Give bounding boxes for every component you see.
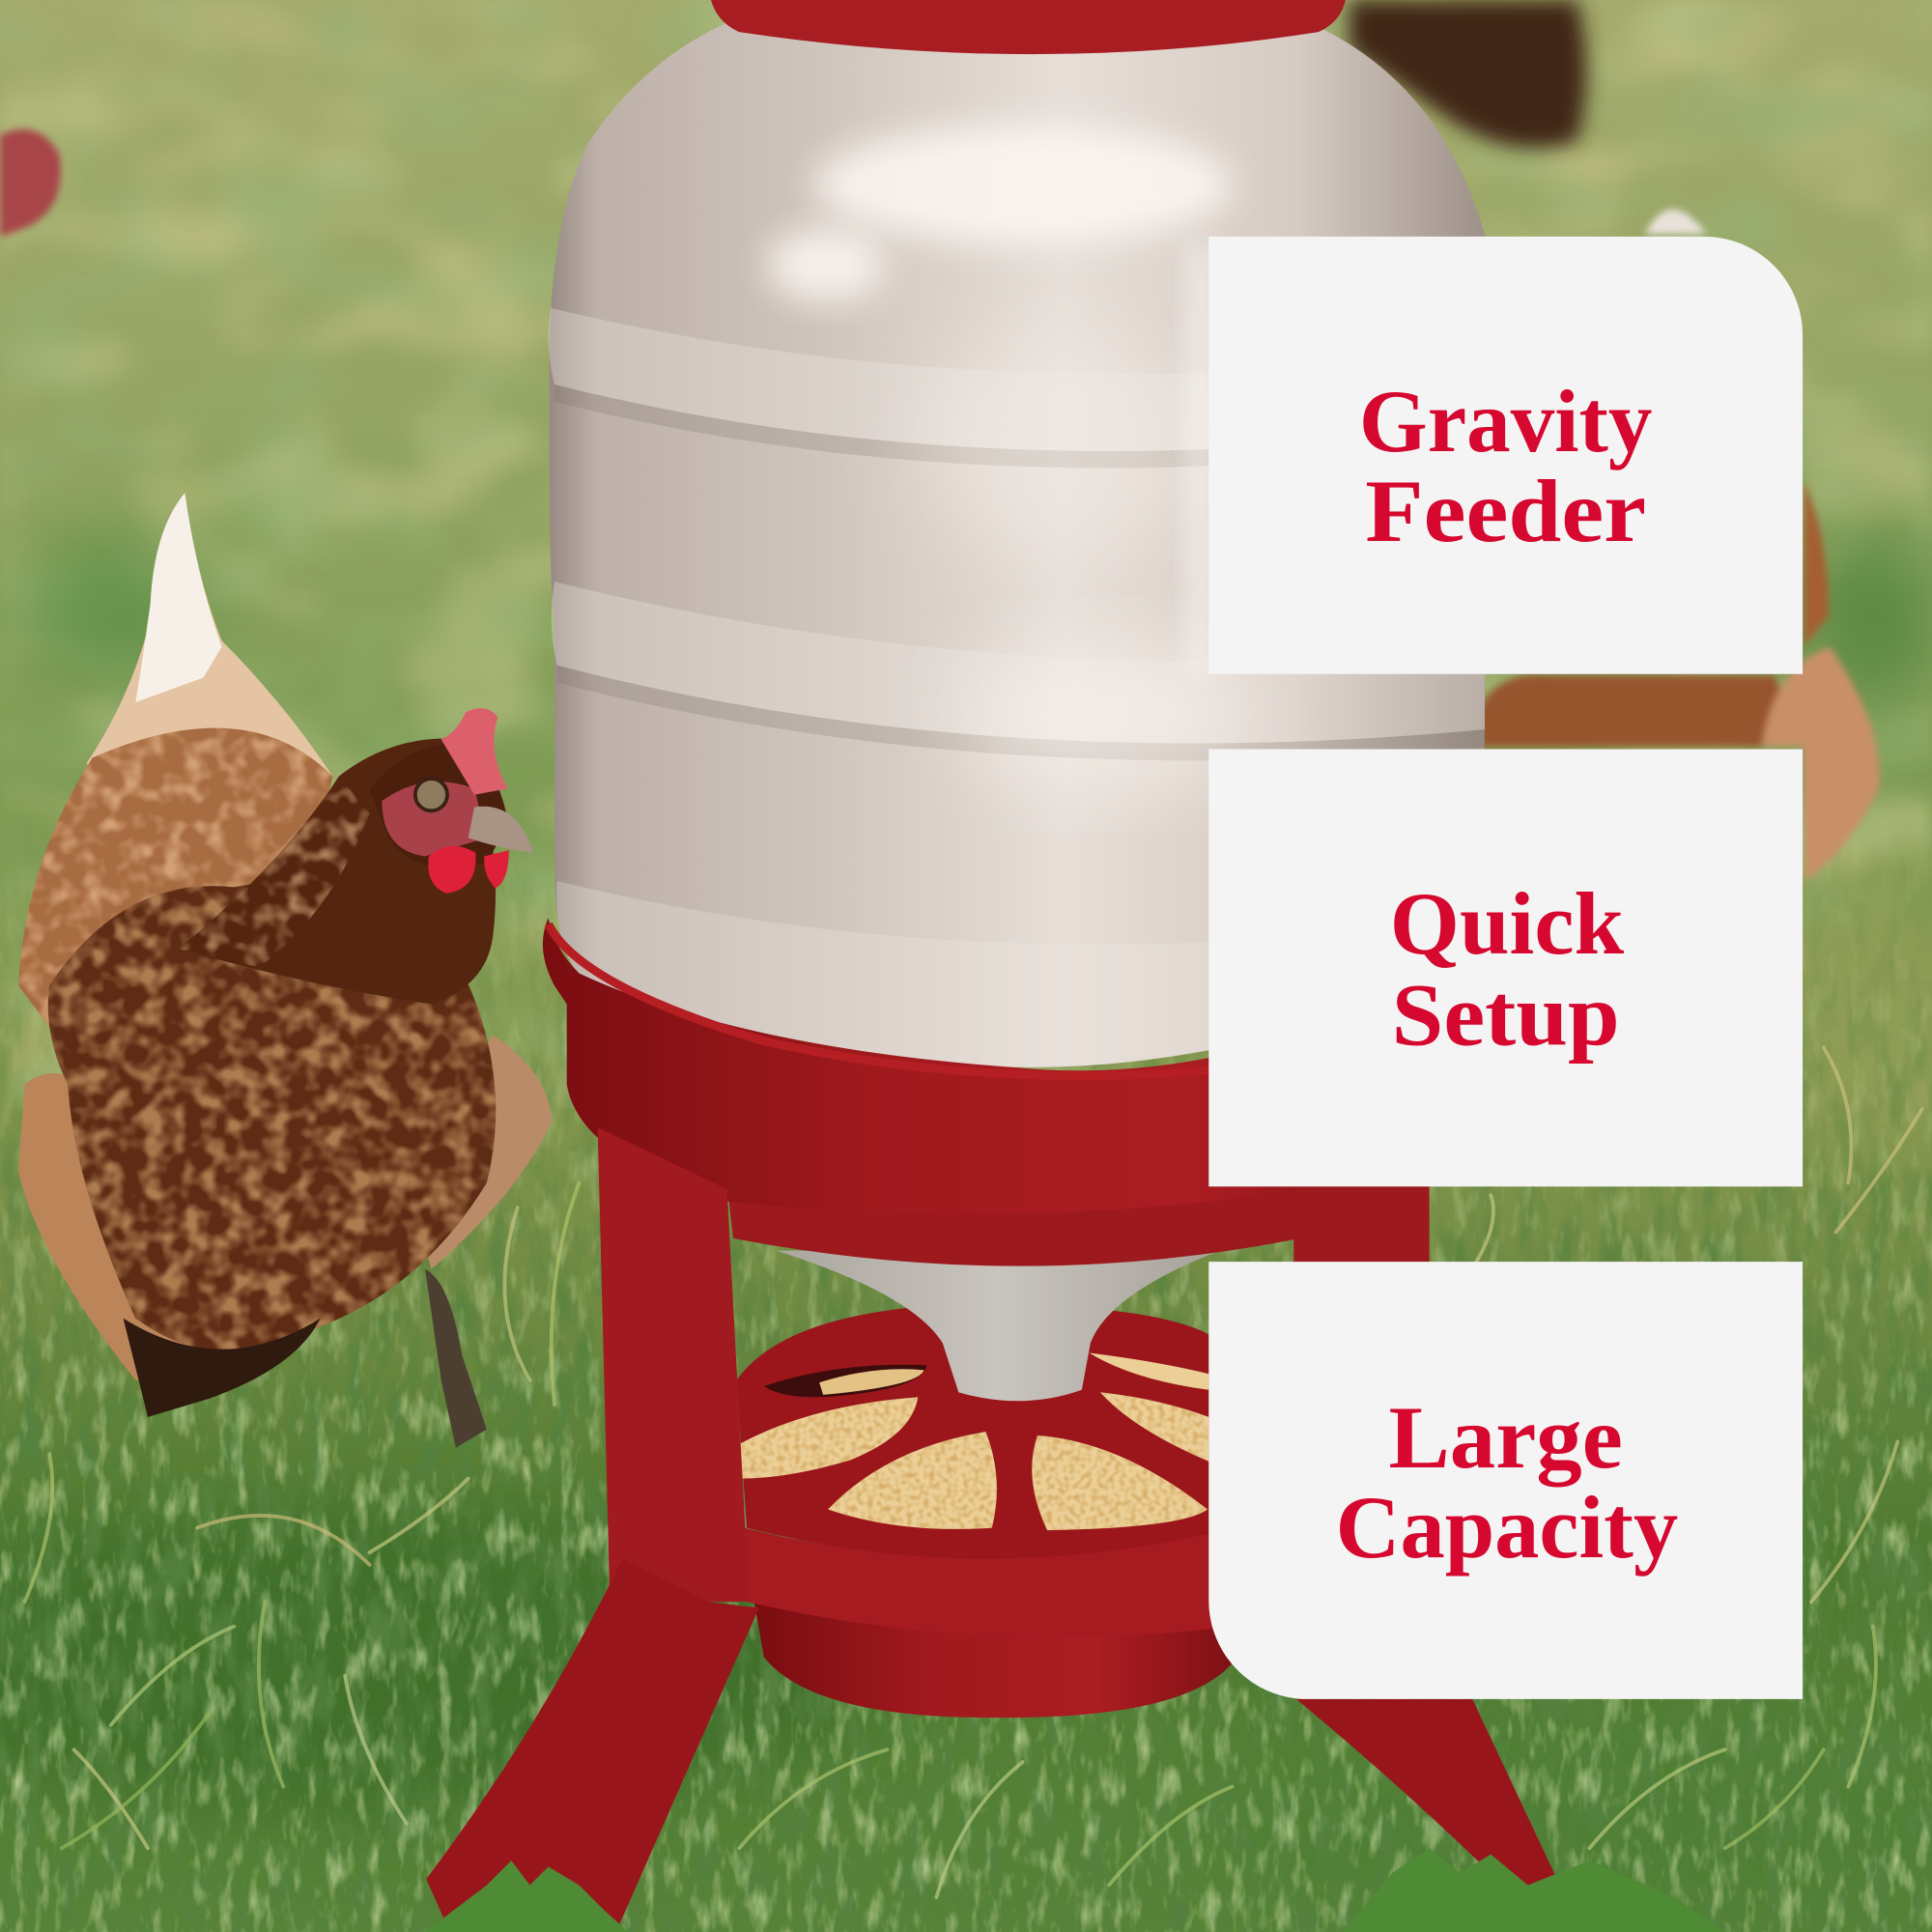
foreground grass tufts [425, 1848, 1725, 1932]
hen [18, 493, 552, 1448]
feeder: bowl lip highlight [549, 924, 1220, 1076]
grass blades [25, 1047, 1922, 1897]
hen: eye [415, 779, 447, 810]
heading: Large Capacity [1336, 1388, 1678, 1577]
feeder [426, 0, 1560, 1932]
card shadow [1189, 246, 1213, 671]
hen: right fluff [407, 1035, 552, 1269]
feeder: lower pan bowl [754, 1602, 1242, 1718]
heading: Quick Setup [1390, 874, 1624, 1065]
hen: feather texture [48, 881, 496, 1352]
background hen: right side [1472, 210, 1880, 881]
hen: back plumage [18, 728, 332, 1060]
feeder: tray [737, 1303, 1233, 1559]
heading: Quick Setup: Quick [1390, 874, 1624, 973]
heading: Large Capacity: Capacity [1336, 1478, 1678, 1577]
hen: beak [469, 807, 533, 853]
hen: rear lower fluff [18, 1073, 210, 1392]
feeder: back right leg [1293, 1182, 1430, 1269]
hen: neck highlights [179, 777, 370, 967]
feeder: barrel highlights [766, 126, 1257, 788]
card: Gravity Feeder [1208, 237, 1803, 674]
heading: Quick Setup: Setup [1392, 966, 1620, 1065]
hen: comb [441, 708, 508, 795]
card: Large Capacity [1208, 1262, 1803, 1699]
feeder: right foot [1296, 1699, 1560, 1910]
feeder: barrel [550, 18, 1485, 1067]
hen: body [48, 881, 496, 1352]
heading: Gravity Feeder [1359, 372, 1653, 560]
feeder: funnel [777, 1251, 1220, 1401]
feeder: red lid [711, 0, 1346, 54]
hen: wattle [428, 846, 509, 894]
hen: leg [425, 1269, 487, 1448]
feeder: pan rim [744, 1516, 1233, 1637]
feeder: left leg [598, 1127, 750, 1602]
heading: Gravity Feeder: Gravity [1359, 372, 1653, 470]
feeder: top bowl rim [543, 918, 1466, 1214]
heading: Gravity Feeder: Feeder [1365, 462, 1646, 560]
heading: Large Capacity: Large [1389, 1388, 1623, 1487]
feeder: corn compartments [739, 1353, 1208, 1530]
feeder: barrel rib bands [549, 308, 1485, 1067]
hen: head [370, 743, 508, 868]
hen: tail underside [124, 1319, 321, 1417]
hen: neck [179, 739, 496, 1005]
feeder: left foot [426, 1559, 759, 1932]
hen: face [382, 781, 487, 856]
background hen: far left comb [0, 129, 61, 237]
feeder: collar [727, 1182, 1300, 1266]
card: Quick Setup [1208, 750, 1803, 1186]
hen: white tail [86, 493, 332, 838]
background hen: top right brown blur [1350, 0, 1586, 148]
